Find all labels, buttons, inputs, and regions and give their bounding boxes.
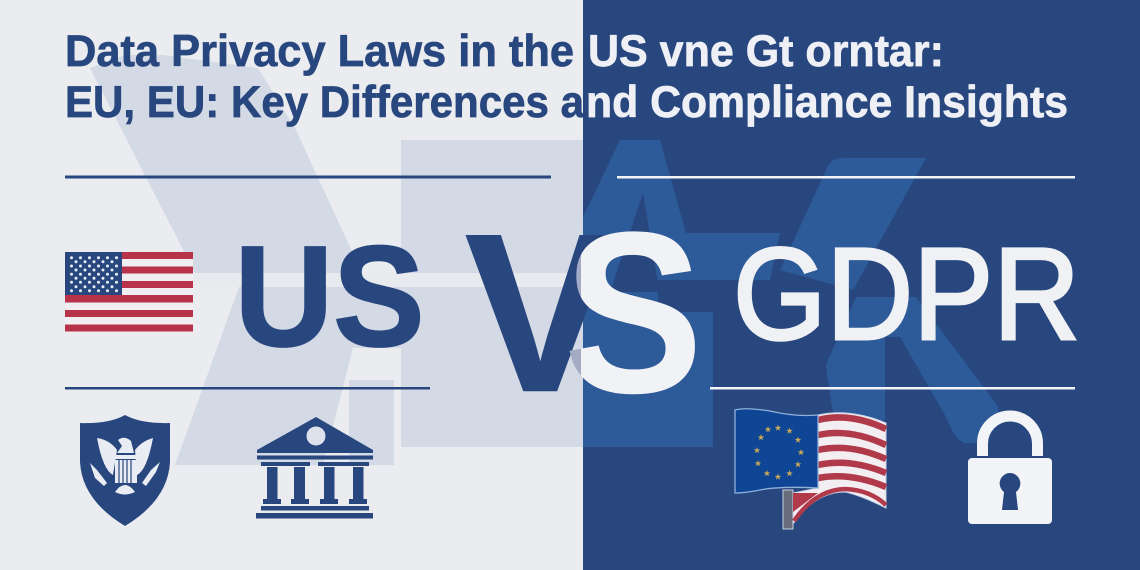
rule: right bottom: [710, 387, 1075, 390]
panel: left light background: [0, 0, 583, 570]
rule: left top: [65, 176, 551, 178]
heading: VS letter V: V: [465, 186, 615, 438]
title line 1 right: US vne Gt orntar:: [588, 27, 944, 76]
icon: padlock: [968, 416, 1052, 524]
heading: VS letter S: S: [564, 184, 703, 441]
rule: left bottom: [65, 387, 430, 390]
title: [65, 27, 1068, 127]
icon: EU and US waving flag: [735, 409, 886, 529]
title line 2 left: EU, EU: Key Differences a: [65, 78, 585, 127]
icon: government building: [256, 417, 373, 518]
rule: right top: [617, 176, 1075, 178]
icon: eagle shield: [80, 415, 170, 526]
title line 1 left: Data Privacy Laws in the: [65, 27, 574, 76]
heading: GDPR: GDPR: [733, 220, 1080, 367]
panel: right dark background: [583, 0, 1140, 570]
title line 2 right: nd Compliance Insights: [586, 78, 1068, 127]
heading: US: US: [234, 218, 424, 376]
icon: US flag: [65, 252, 193, 332]
